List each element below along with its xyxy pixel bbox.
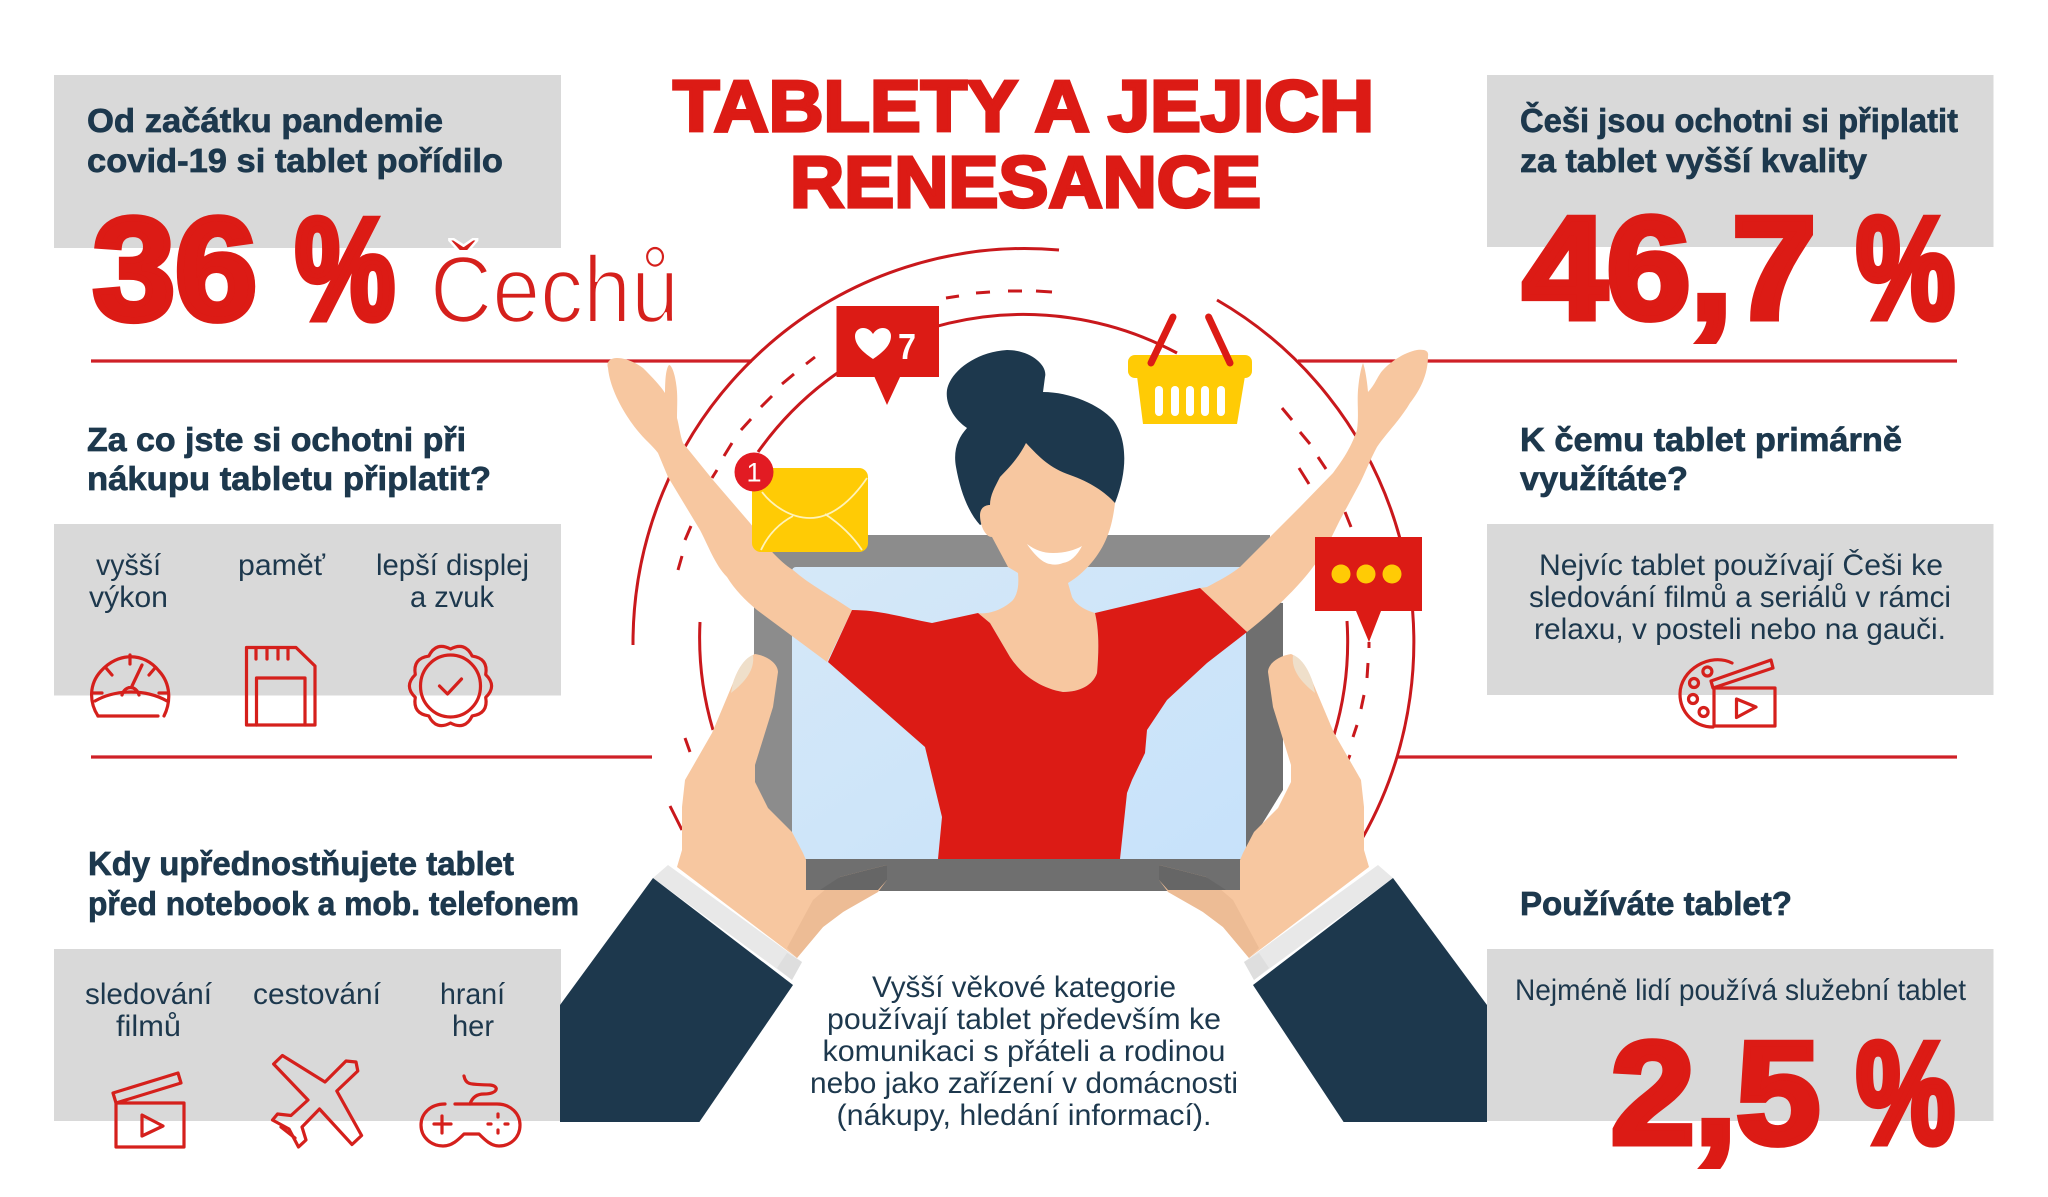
right sleeve xyxy=(1253,878,1487,1122)
title: RENESANCE xyxy=(790,143,1261,223)
icon: like bubble: 7 xyxy=(898,326,916,367)
heading: Czechs willing to pay extra: Češi jsou ochotni si připlatit xyxy=(1520,101,1958,139)
text: older age groups: nebo jako zařízení v domácnosti xyxy=(810,1067,1238,1100)
icon: chat bubble xyxy=(1315,537,1422,642)
panel: what the tablet is primarily used for xyxy=(1487,421,1994,727)
text: most used for films and series: Nejvíc tablet používají Češi ke xyxy=(1539,548,1943,582)
heading: since the pandemic: Od začátku pandemie xyxy=(87,102,443,139)
heading: what to pay extra for: Za co jste si ochotni při xyxy=(87,421,466,458)
icon: memory card xyxy=(246,648,315,725)
heading: since the pandemic xyxy=(87,102,503,179)
text: older age groups xyxy=(810,971,1238,1132)
right hand xyxy=(1168,654,1369,958)
text: most used for films and series: relaxu, v posteli nebo na gauči. xyxy=(1534,613,1946,646)
text: fewest use a work tablet: Nejméně lidí používá služební tablet xyxy=(1515,974,1967,1007)
big number: 2,5 % xyxy=(1611,1012,1955,1174)
big number: 2,5 %: 2,5 xyxy=(1611,1012,1820,1174)
heading: primary use: K čemu tablet primárně xyxy=(1520,421,1902,458)
text: older age groups: (nákupy, hledání informací). xyxy=(836,1099,1212,1132)
icon: speedometer xyxy=(92,655,169,716)
panel: 46,7 percent xyxy=(1487,75,1994,349)
text: older age groups: komunikaci s přáteli a rodinou xyxy=(822,1035,1226,1068)
heading: prefer tablet: Kdy upřednostňujete tablet xyxy=(88,845,514,882)
icon: film clapper xyxy=(113,1073,184,1147)
panel: 36 percent of Czechs xyxy=(54,75,679,350)
label: better display and sound xyxy=(376,549,529,614)
label: Čechů: Čechů xyxy=(430,237,679,343)
icon: like bubble xyxy=(836,306,939,405)
label: gaming: her xyxy=(452,1010,494,1043)
panel: when do you prefer a tablet xyxy=(54,845,579,1147)
title xyxy=(673,67,1374,223)
heading: Czechs willing to pay extra xyxy=(1520,101,1958,179)
label: watching films: filmů xyxy=(116,1010,181,1043)
illustration: tablet held in hands with woman xyxy=(560,350,1487,1122)
arms xyxy=(607,358,852,662)
label: watching films: sledování xyxy=(85,978,213,1011)
label: higher performance: výkon xyxy=(89,581,168,614)
left cuff xyxy=(653,865,802,980)
decorative orbit arcs xyxy=(633,249,1414,837)
label: gaming: hraní xyxy=(440,978,506,1011)
heading: do you use a tablet: Používáte tablet? xyxy=(1520,885,1792,922)
heading: what to pay extra for xyxy=(87,421,491,497)
woman xyxy=(607,350,1428,859)
label: gaming xyxy=(440,978,506,1043)
icon: palette and clapper xyxy=(1680,660,1775,727)
title: TABLETY A JEJICH xyxy=(673,67,1374,147)
right cuff xyxy=(1244,865,1393,980)
text: most used for films and series: sledování filmů a seriálů v rámci xyxy=(1529,581,1951,614)
big number: 36 %: 36 xyxy=(93,188,257,350)
face and neck xyxy=(978,443,1115,692)
text: most used for films and series xyxy=(1529,548,1951,646)
heading: prefer tablet: před notebook a mob. telefonem xyxy=(88,885,579,922)
tablet xyxy=(754,535,1283,891)
heading: Czechs willing to pay extra: za tablet vyšší kvality xyxy=(1520,142,1868,179)
label: travel: cestování xyxy=(253,978,382,1011)
heading: since the pandemic: covid-19 si tablet pořídilo xyxy=(87,142,503,179)
heading: what to pay extra for: nákupu tabletu připlatit? xyxy=(87,460,491,497)
label: memory: paměť xyxy=(238,549,326,582)
big number: 36 % xyxy=(93,188,395,350)
left hand xyxy=(677,654,878,958)
icon: shopping basket xyxy=(1128,317,1252,424)
right hand and sleeve xyxy=(1159,654,1487,1122)
heading: primary use xyxy=(1520,421,1902,497)
icon: game controller xyxy=(421,1076,520,1146)
big number: 36 %: % xyxy=(295,188,395,350)
big number: 46,7 % xyxy=(1523,187,1955,349)
label: better display and sound: lepší displej xyxy=(376,549,529,582)
shirt xyxy=(828,588,1247,859)
left sleeve xyxy=(560,878,793,1122)
smile xyxy=(1027,544,1082,565)
icon: envelope with notification: 1 xyxy=(746,458,762,488)
heading: prefer tablet xyxy=(88,845,579,922)
icon: envelope with notification xyxy=(734,452,868,552)
icon: airplane xyxy=(272,1056,362,1147)
panel: what are you willing to pay extra for xyxy=(54,421,561,726)
heading: primary use: využítáte? xyxy=(1520,460,1688,497)
hair xyxy=(947,350,1124,525)
big number: 46,7 %: 46,7 xyxy=(1523,187,1816,349)
label: higher performance xyxy=(89,549,168,614)
big number: 2,5 %: % xyxy=(1856,1012,1955,1174)
label: watching films xyxy=(85,978,213,1043)
label: better display and sound: a zvuk xyxy=(410,581,495,614)
panel: do you use a tablet xyxy=(1487,885,1994,1174)
icon: quality badge xyxy=(409,646,492,726)
big number: 46,7 %: % xyxy=(1856,187,1955,349)
left hand and sleeve xyxy=(560,654,887,1122)
label: higher performance: vyšší xyxy=(96,549,162,582)
text: older age groups: Vyšší věkové kategorie xyxy=(872,971,1176,1004)
text: older age groups: používají tablet především ke xyxy=(827,1003,1221,1036)
